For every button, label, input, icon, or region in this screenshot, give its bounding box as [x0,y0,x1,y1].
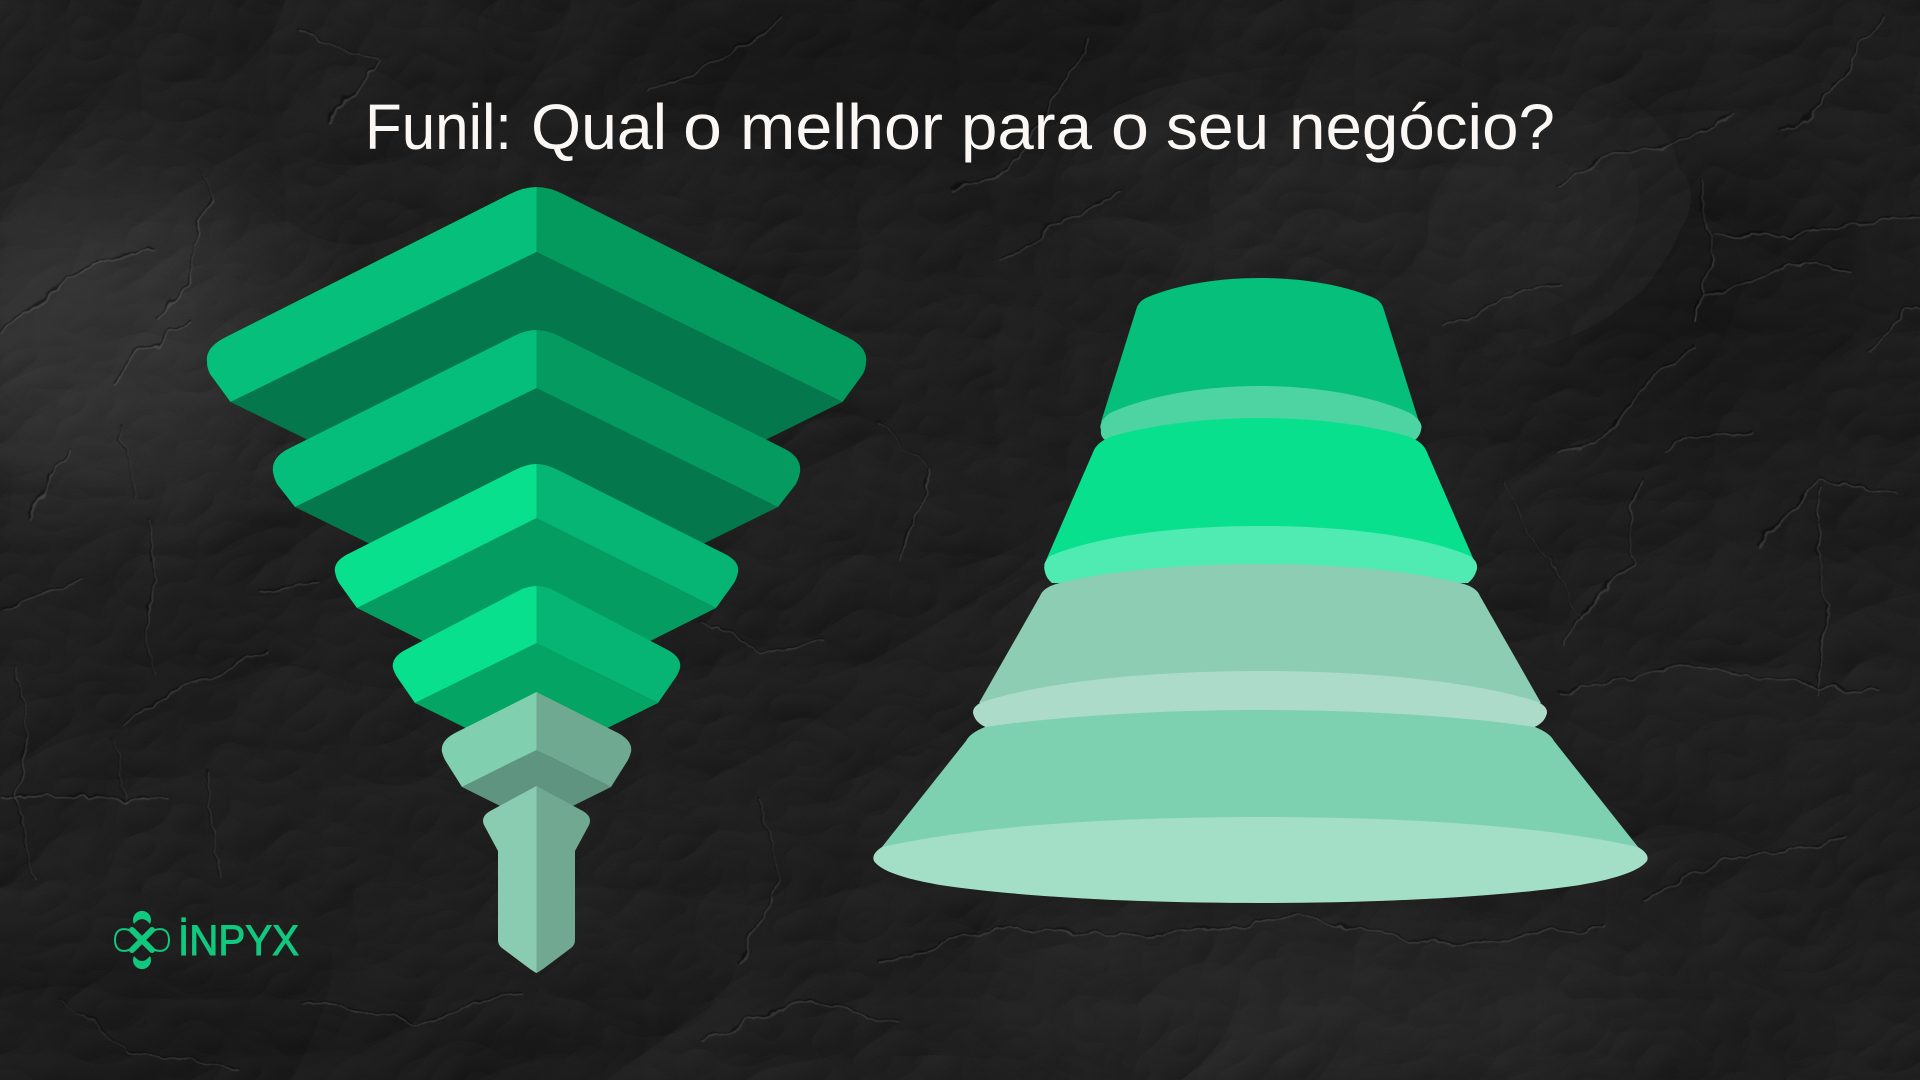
cone tier 2 [1044,418,1477,583]
title: para [961,91,1092,163]
cone tier 3 [973,564,1547,728]
funnel layer 5 [442,692,631,824]
funnel layer 4 [393,586,680,763]
title: o [1111,91,1149,163]
title: Funil: [365,91,512,163]
cone tier 1 [1100,278,1422,440]
funnel layer 6: spout [483,786,590,973]
logo wordmark: İNPYX [178,917,299,965]
title: Qual [531,91,667,163]
cone tier 4 [873,710,1648,903]
title: o [683,91,722,163]
funnel layer 2 [273,330,800,626]
icon: clover infinity mark [115,911,169,969]
chart: stacked cone pyramid [873,278,1648,903]
title: seu [1166,91,1269,163]
funnel layer 3 [335,464,738,698]
title: melhor [740,91,943,163]
title: negócio? [1289,91,1555,163]
funnel layer 1 [207,187,866,552]
logo: INPYX [115,911,299,969]
chart: layered chevron funnel [207,187,866,973]
